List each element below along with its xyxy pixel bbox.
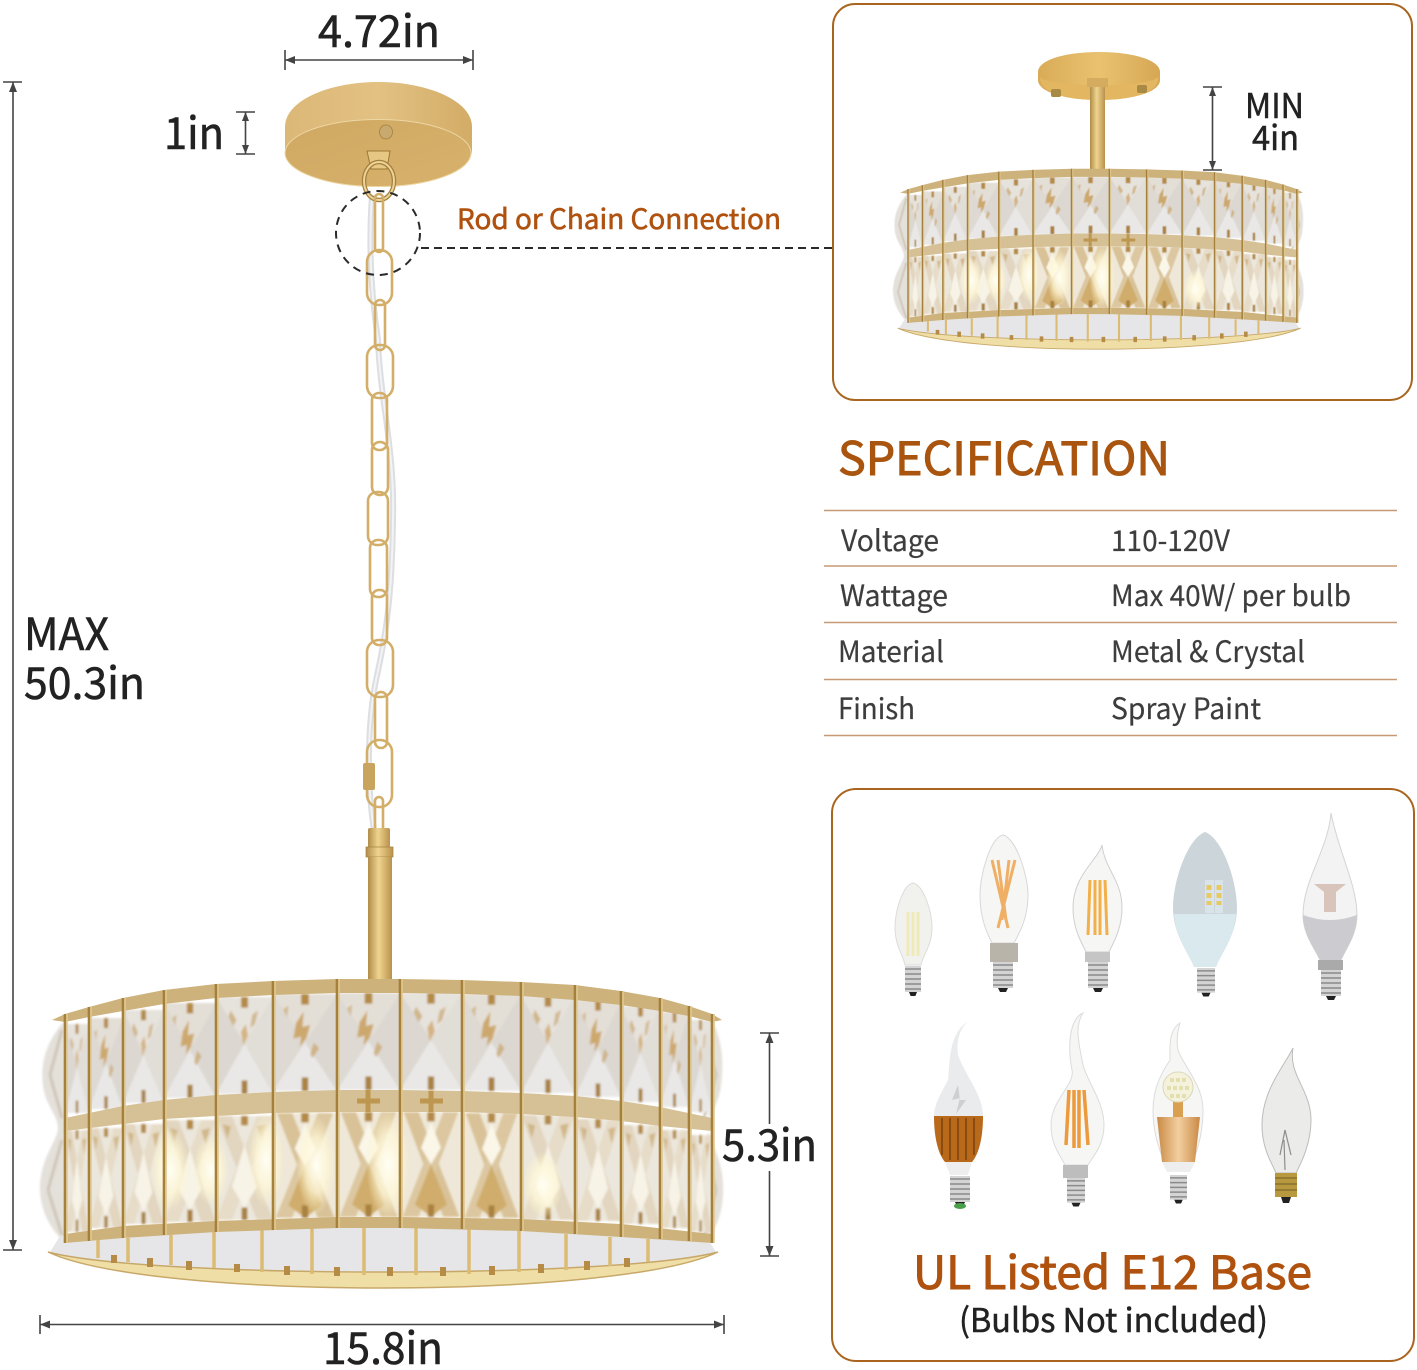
- row: material: [838, 629, 1305, 671]
- row: material: Material: [838, 629, 944, 671]
- dimension: canopy height: 1in: [164, 98, 224, 162]
- row: voltage: [841, 518, 1230, 560]
- bulb 1: frosted filament candle: [895, 883, 932, 996]
- bulb 5: flame tip with silver base: [1303, 813, 1357, 1000]
- heading: UL listed E12 base: UL Listed E12 Base: [913, 1237, 1312, 1303]
- dimension: maximum height: MAX: [24, 599, 109, 663]
- dimension: minimum rod: [1203, 79, 1304, 170]
- dimension: drum height: [722, 1033, 817, 1256]
- row: finish: Finish: [838, 686, 915, 728]
- heading: specification: SPECIFICATION: [838, 423, 1170, 489]
- bulb 9: clear incandescent with brass base: [1262, 1048, 1311, 1203]
- panel: semi-flush rod mount: [833, 4, 1412, 400]
- bulb 7: bent tip orange filament: [1051, 1013, 1104, 1206]
- crystal drum shade: [40, 979, 723, 1288]
- panel: compatible bulbs: [832, 789, 1414, 1361]
- chain: [363, 194, 393, 837]
- hanging rod: [366, 828, 393, 982]
- row: finish: Spray Paint: [1111, 686, 1261, 728]
- note: bulbs not included: (Bulbs Not included): [959, 1294, 1268, 1342]
- dimension: drum height: 5.3in: [722, 1110, 817, 1174]
- dimension: maximum height: 50.3in: [24, 648, 145, 712]
- row: wattage: Wattage: [840, 573, 948, 615]
- dimension: drum width: [40, 1313, 724, 1370]
- rod mount canopy: [1038, 52, 1160, 170]
- rod mount drum: [893, 169, 1304, 349]
- bulb 2: clear candle with crossed filament: [980, 835, 1028, 992]
- dimension: minimum rod: MIN: [1245, 79, 1304, 128]
- bulb 8: LED ball with copper cone: [1153, 1023, 1203, 1204]
- row: finish: [838, 686, 1261, 728]
- main pendant chandelier: [40, 82, 723, 1288]
- dimension: minimum rod: 4in: [1252, 111, 1299, 160]
- row: material: Metal & Crystal: [1111, 629, 1305, 671]
- power cable: [369, 195, 393, 830]
- row: voltage: 110-120V: [1111, 518, 1230, 560]
- specification table: [824, 510, 1397, 736]
- callout: rod or chain connection: [336, 191, 832, 275]
- row: wattage: [840, 573, 1351, 615]
- dimension: canopy width: [285, 0, 473, 70]
- dimension: maximum height: [3, 82, 145, 1250]
- dimension: canopy height: [164, 98, 255, 162]
- bulb 4: LED candle with white base: [1173, 832, 1237, 996]
- row: voltage: Voltage: [841, 518, 939, 560]
- bulb 3: flame tip filament: [1073, 845, 1122, 992]
- callout: rod or chain connection: Rod or Chain Connection: [457, 198, 781, 238]
- row: wattage: Max 40W/ per bulb: [1111, 573, 1351, 615]
- bulb 6: flame tip with copper base: [934, 1022, 983, 1209]
- ceiling canopy: [285, 82, 472, 200]
